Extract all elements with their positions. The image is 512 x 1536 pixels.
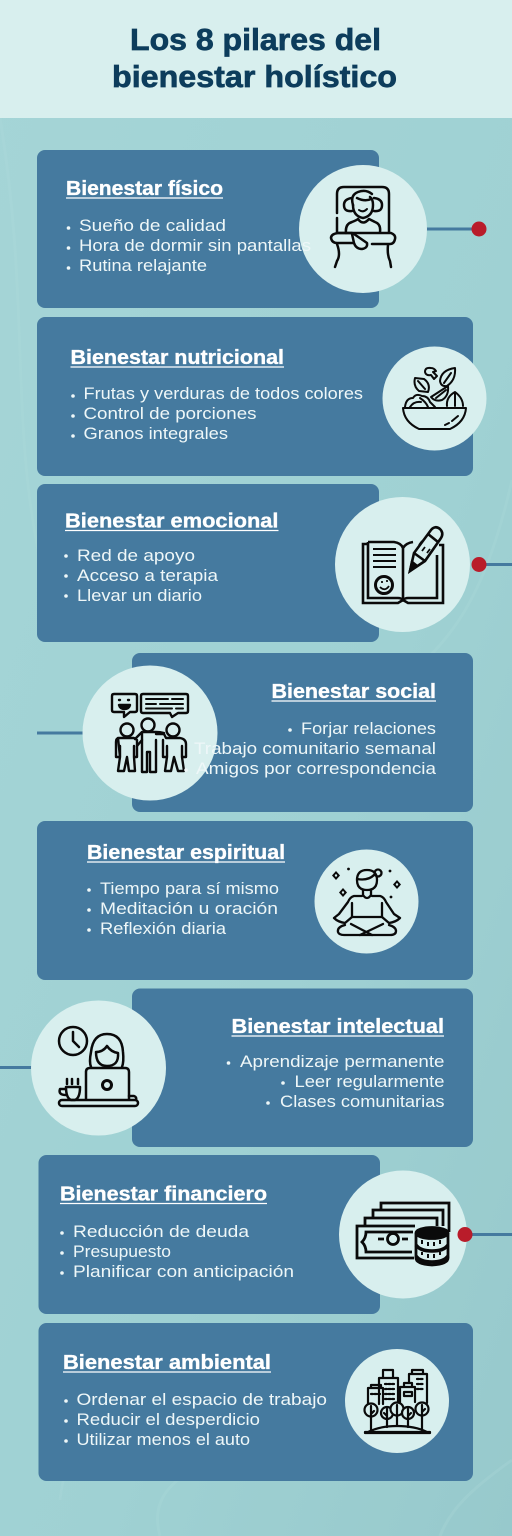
heading: Bienestar social (272, 681, 436, 703)
panel: Bienestar intelectual (0, 988, 473, 1147)
list: Reflexión diaria (100, 919, 227, 938)
panel: Bienestar espiritual (37, 821, 473, 980)
icon: city with trees (364, 1370, 430, 1433)
icon: person on laptop (59, 1027, 138, 1106)
list (71, 384, 363, 443)
icon: sparkles (332, 868, 401, 898)
list: Aprendizaje permanente (240, 1052, 444, 1071)
list: Acceso a terapia (77, 566, 219, 585)
title (112, 22, 397, 94)
panel: Bienestar financiero (38, 1155, 512, 1314)
heading: Bienestar espiritual (87, 842, 285, 864)
icon: money and coins (357, 1203, 449, 1265)
list: Clases comunitarias (280, 1092, 444, 1111)
list: Granos integrales (84, 424, 228, 443)
icon: journal and pencil (363, 527, 443, 603)
list: Forjar relaciones (301, 719, 436, 738)
list: Planificar con anticipación (73, 1262, 294, 1281)
heading: Bienestar intelectual (232, 1016, 444, 1038)
list: Presupuesto (73, 1242, 171, 1261)
list: Frutas y verduras de todos colores (84, 384, 363, 403)
icon: salad bowl (403, 368, 466, 429)
list: Reducir el desperdicio (76, 1410, 260, 1429)
list: Sueño de calidad (79, 216, 226, 235)
list: Ordenar el espacio de trabajo (76, 1390, 327, 1409)
heading: Bienestar físico (66, 178, 223, 200)
list: Rutina relajante (79, 256, 207, 275)
list: Trabajo comunitario semanal (194, 739, 436, 758)
list: Control de porciones (84, 404, 256, 423)
title: Los 8 pilares del (130, 22, 381, 57)
header (0, 0, 512, 118)
list (227, 1052, 444, 1111)
list: Red de apoyo (77, 546, 195, 565)
list (64, 546, 219, 605)
title: bienestar holístico (112, 59, 397, 94)
icon: person resting in bed (331, 187, 395, 267)
list: Amigos por correspondencia (196, 759, 437, 778)
list: Hora de dormir sin pantallas (79, 236, 311, 255)
icon: group conversation (112, 694, 188, 772)
list (87, 879, 279, 938)
list: Meditación u oración (100, 899, 278, 918)
heading: Bienestar emocional (65, 510, 278, 532)
list: Tiempo para sí mismo (100, 879, 279, 898)
list (184, 719, 437, 778)
panel: Bienestar ambiental (38, 1323, 473, 1481)
panel: Bienestar físico (37, 150, 486, 308)
list (67, 216, 311, 275)
list (60, 1222, 294, 1281)
panel: Bienestar social (37, 653, 473, 812)
heading: Bienestar ambiental (63, 1352, 271, 1374)
heading: Bienestar nutricional (70, 347, 284, 369)
list: Utilizar menos el auto (76, 1430, 250, 1449)
list: Reducción de deuda (73, 1222, 250, 1241)
list: Leer regularmente (294, 1072, 444, 1091)
panel: Bienestar emocional (37, 484, 512, 642)
icon: meditating person (334, 870, 400, 935)
list (64, 1390, 327, 1449)
list: Llevar un diario (77, 586, 202, 605)
heading: Bienestar financiero (60, 1184, 267, 1206)
panel: Bienestar nutricional (37, 317, 486, 476)
